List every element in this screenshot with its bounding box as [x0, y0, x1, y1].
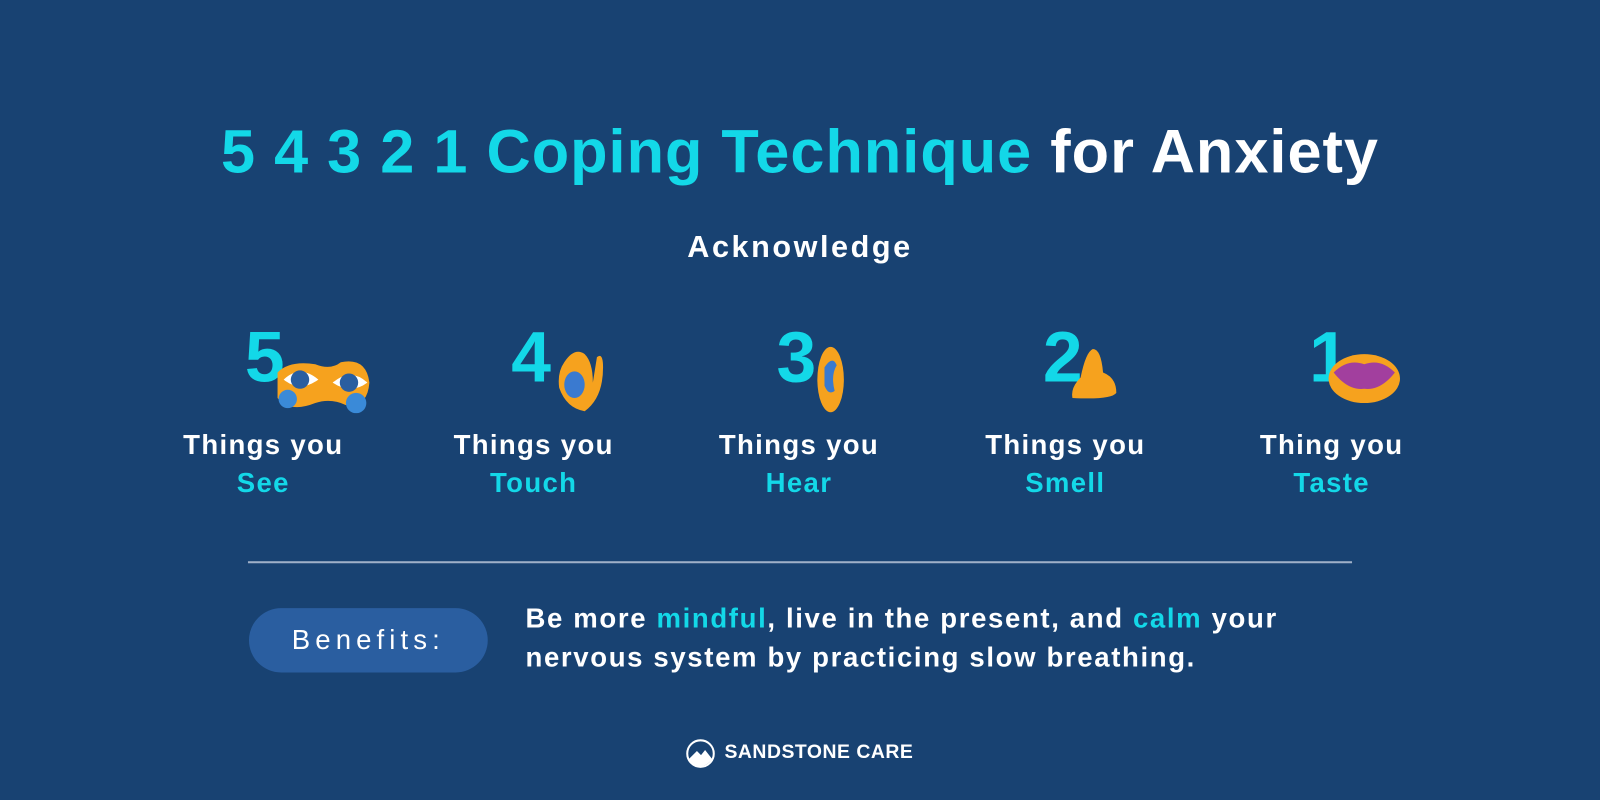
- item: see: [183, 317, 370, 498]
- number 3: 3: [777, 317, 816, 397]
- label: Touch: [490, 467, 577, 498]
- item: touch: [454, 317, 614, 498]
- label: [183, 430, 343, 498]
- icon: ear: [817, 346, 844, 412]
- label: [1260, 430, 1403, 498]
- label: See: [237, 467, 290, 498]
- label: [719, 430, 879, 498]
- label: Things you: [985, 430, 1145, 460]
- label: Taste: [1293, 467, 1370, 498]
- number 4: 4: [511, 317, 551, 397]
- benefits text: nervous system by practicing slow breathing.: [526, 642, 1196, 672]
- label: [454, 430, 614, 498]
- icon: logo: [686, 739, 715, 768]
- label: Things you: [183, 430, 343, 460]
- logo: SANDSTONE CARE: [724, 742, 913, 763]
- logo: [686, 739, 913, 768]
- benefits text: Be more mindful, live in the present, and calm your: [526, 603, 1278, 634]
- icon: lips: [1328, 354, 1400, 403]
- benefits pill: [249, 608, 488, 672]
- label: Smell: [1025, 467, 1105, 498]
- icon: eyes: [278, 361, 370, 414]
- item: taste: [1260, 317, 1403, 498]
- label: Things you: [454, 430, 614, 460]
- number 2: 2: [1043, 317, 1083, 397]
- benefits pill: Benefits:: [292, 624, 445, 655]
- label: Things you: [719, 430, 879, 460]
- label: Hear: [766, 467, 832, 498]
- number 1: 1: [1309, 317, 1349, 397]
- icon: nose: [1072, 349, 1116, 398]
- icon: hand: [558, 352, 604, 412]
- label: [985, 430, 1145, 498]
- subtitle: Acknowledge: Acknowledge: [687, 231, 913, 264]
- label: Thing you: [1260, 430, 1403, 460]
- benefits text: [526, 603, 1278, 672]
- title: 5 4 3 2 1 Coping Technique for Anxiety: [221, 117, 1379, 186]
- item: smell: [985, 317, 1145, 498]
- item: hear: [719, 317, 879, 498]
- number 5: 5: [245, 317, 285, 397]
